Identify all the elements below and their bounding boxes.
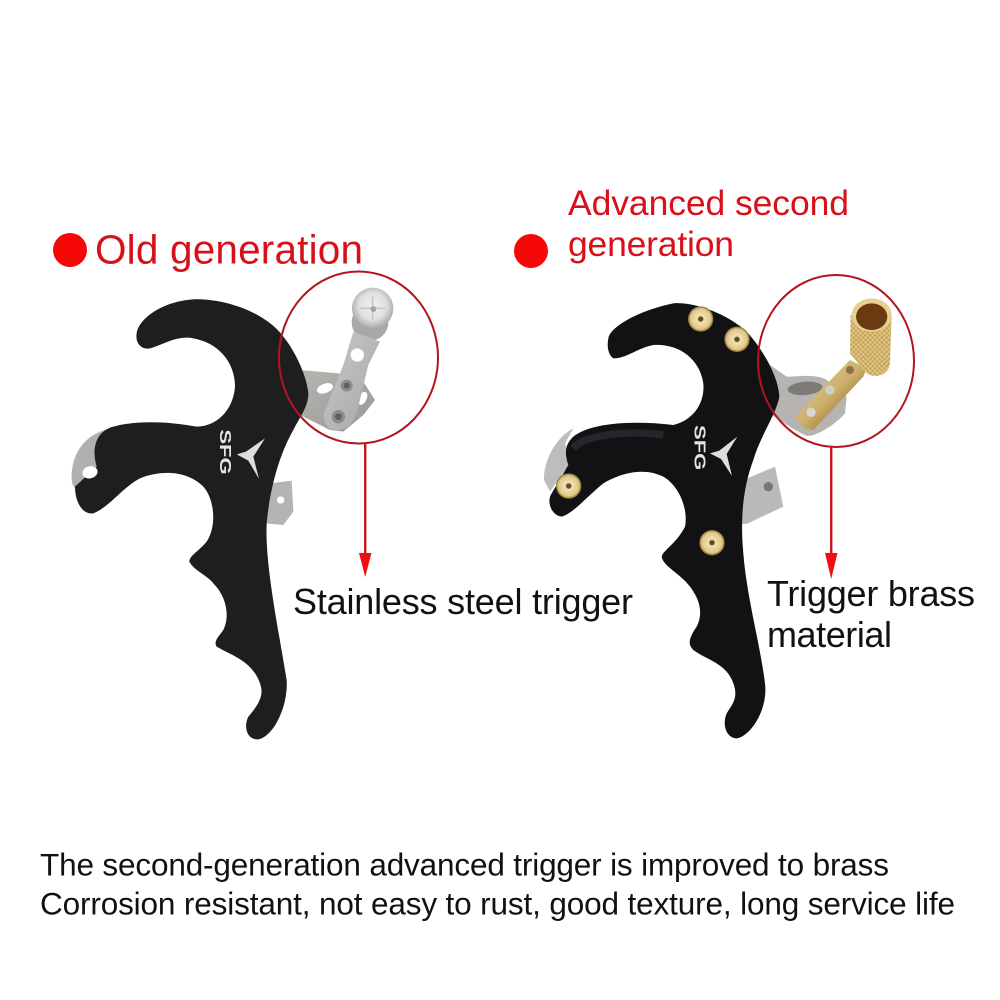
heading text: advanced second generation: generation xyxy=(568,224,734,264)
description text: Corrosion resistant, not easy to rust, good texture, long service life xyxy=(40,886,955,922)
callout circle: old trigger xyxy=(279,272,438,444)
trigger ball xyxy=(352,288,393,329)
trigger plate xyxy=(293,370,375,432)
logo mark xyxy=(216,429,265,479)
heading: advanced second generation xyxy=(514,183,849,268)
black body xyxy=(549,303,779,738)
steel left tab xyxy=(544,428,573,492)
product: old generation release xyxy=(72,288,393,739)
knurled ring xyxy=(352,304,388,341)
heading text: old generation: Old generation xyxy=(95,226,363,272)
bullet: advanced second generation xyxy=(514,234,548,268)
arrow: brass trigger xyxy=(825,447,838,579)
brass arm xyxy=(795,360,867,430)
label: trigger brass material: material xyxy=(767,614,892,655)
product: advanced second generation release xyxy=(544,298,892,738)
black body xyxy=(75,299,308,739)
label: stainless steel trigger: Stainless steel trigger xyxy=(293,581,633,622)
rivet xyxy=(724,327,750,352)
arrow: old trigger xyxy=(359,443,372,577)
heading: old generation xyxy=(53,226,363,272)
logo mark xyxy=(690,425,737,476)
knurled barrel xyxy=(850,315,892,376)
logo mark: SFG xyxy=(690,425,707,470)
bullet: old generation xyxy=(53,233,87,267)
rivet xyxy=(688,306,713,332)
steel left tab xyxy=(72,429,107,490)
label: trigger brass material: Trigger brass xyxy=(767,573,975,614)
rivet xyxy=(699,530,725,555)
steel rear tab xyxy=(742,467,783,524)
description text: The second-generation advanced trigger is improved to brass xyxy=(40,846,889,882)
steel rear tab xyxy=(265,481,293,525)
brass trigger xyxy=(767,298,892,436)
rivet xyxy=(556,473,581,499)
steel trigger xyxy=(293,288,393,432)
heading text: advanced second generation: Advanced second xyxy=(568,183,849,223)
trigger plate xyxy=(767,365,847,436)
logo mark: SFG xyxy=(216,429,233,475)
tab hole xyxy=(81,465,99,480)
trigger arm xyxy=(324,332,380,430)
gloss highlight xyxy=(573,433,663,448)
callout circle: brass trigger xyxy=(758,275,914,447)
